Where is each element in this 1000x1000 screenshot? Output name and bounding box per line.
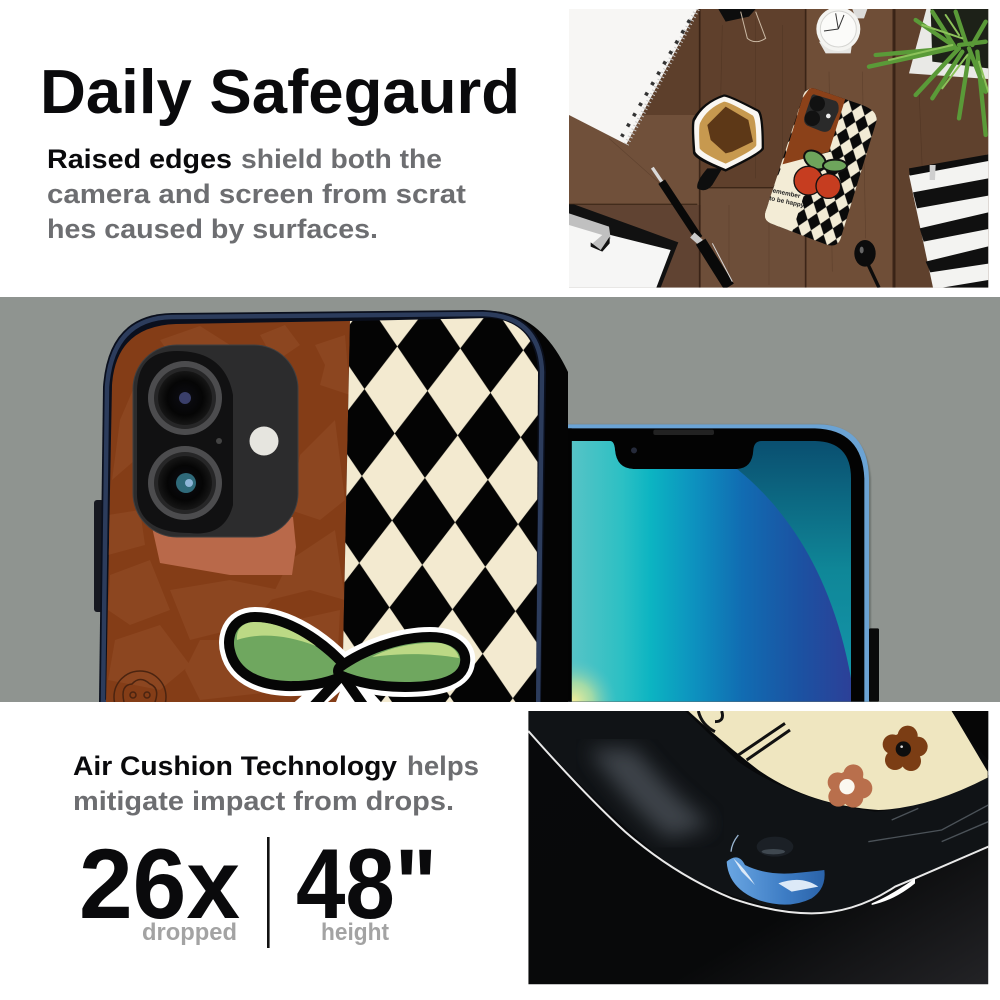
text block: air cushion technology: mitigate impact from drops. <box>73 786 454 816</box>
text block: raised edges description <box>47 144 466 244</box>
flash <box>250 426 278 456</box>
cherries <box>794 147 847 198</box>
rear phone body <box>490 311 568 702</box>
bumper edge <box>528 711 988 913</box>
front phone screen <box>552 424 879 702</box>
camera island <box>804 94 839 132</box>
panel: gray band with phones <box>0 297 1000 723</box>
stat: 48 inches height: height <box>321 919 389 946</box>
alarm clock <box>816 7 867 53</box>
text block: raised edges description: Raised edges <box>47 144 232 174</box>
notebook with spiral binding <box>569 9 697 144</box>
clipboard <box>569 204 678 288</box>
stat: 48 inches height: 48" <box>296 828 437 939</box>
lower lens <box>148 446 222 520</box>
salmon patch <box>152 517 296 575</box>
case brown half with camouflage blotches <box>100 315 360 705</box>
cream case surface <box>688 711 988 810</box>
striped notebook <box>909 154 988 288</box>
flower: salmon <box>828 764 872 808</box>
button emblem <box>113 670 167 702</box>
white edge highlight <box>528 731 988 913</box>
text block: air cushion technology: Air Cushion Technology <box>73 751 397 781</box>
potted plant <box>869 9 988 135</box>
text block: air cushion technology <box>73 751 479 816</box>
coffee cup <box>692 94 764 190</box>
miniature phone with case: emember <box>772 187 801 200</box>
stat: 26x dropped: 26x <box>79 828 240 939</box>
photo: phone case flat lay on wooden desk <box>569 7 988 288</box>
miniature phone with case: to be happy <box>769 195 805 209</box>
flower: dark brown <box>883 726 928 771</box>
blue air cushion bubble <box>727 835 825 905</box>
upper lens <box>148 361 222 435</box>
binder clip and string <box>718 9 766 42</box>
sprout sticker <box>234 622 460 712</box>
title: Daily Safegaurd <box>40 58 520 127</box>
divider <box>267 837 270 948</box>
text block: raised edges description: camera and screen from scrat <box>47 179 466 209</box>
miniature phone with case <box>765 88 877 246</box>
photo: air cushion corner close-up <box>528 711 988 984</box>
text block: raised edges description: hes caused by surfaces. <box>47 214 378 244</box>
camera island <box>133 345 298 537</box>
spoon <box>854 240 879 288</box>
text block: raised edges description: shield both the <box>241 144 442 174</box>
case checkered half <box>340 318 540 702</box>
stat: 26x dropped: dropped <box>142 919 237 946</box>
text block: air cushion technology: helps <box>407 751 479 781</box>
pen <box>652 168 732 287</box>
